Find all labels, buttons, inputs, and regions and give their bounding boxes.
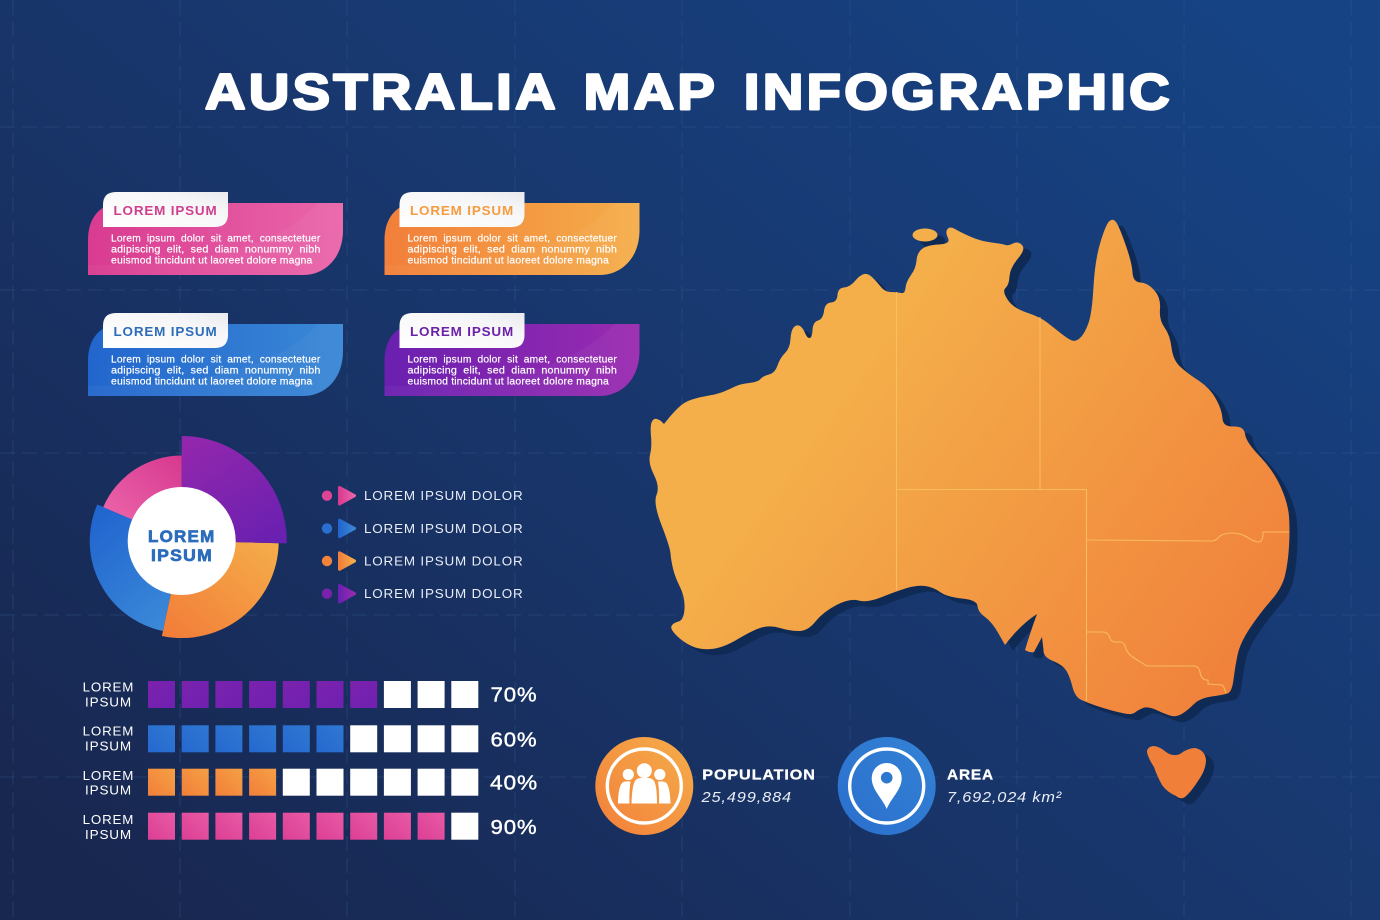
row: 40%: IPSUM xyxy=(85,783,132,798)
card body text: euismod tincidunt ut laoreet dolore magna xyxy=(408,254,609,266)
state borders xyxy=(896,292,1289,701)
row: 70%: LOREM xyxy=(83,679,134,694)
donut label xyxy=(148,528,216,565)
row: 60% xyxy=(83,724,537,753)
row: 60%: IPSUM xyxy=(85,738,132,753)
row: 40% xyxy=(83,768,538,798)
card body text xyxy=(111,232,321,266)
icon: location pin xyxy=(838,737,936,835)
card heading: LOREM IPSUM xyxy=(410,203,514,218)
card body xyxy=(88,324,343,396)
card body text: euismod tincidunt ut laoreet dolore magna xyxy=(408,376,609,388)
donut label: IPSUM xyxy=(151,547,213,565)
card body xyxy=(88,203,343,275)
card tab xyxy=(103,313,228,348)
panel: blue text card xyxy=(88,313,343,396)
card body text: adipiscing elit, sed diam nonummy nibh xyxy=(111,244,320,256)
card body text: Lorem ipsum dolor sit amet, consectetuer xyxy=(408,354,617,366)
segment: purple xyxy=(182,436,287,543)
Melville island xyxy=(912,228,938,242)
card tab xyxy=(103,192,228,227)
Tasmania xyxy=(1147,746,1206,798)
card tab xyxy=(400,313,524,348)
card body text: Lorem ipsum dolor sit amet, consectetuer xyxy=(408,232,617,244)
icon: people xyxy=(595,737,693,835)
card body text xyxy=(408,232,617,266)
segment: blue xyxy=(90,504,172,631)
row: 90% xyxy=(83,812,537,842)
card body text: adipiscing elit, sed diam nonummy nibh xyxy=(408,364,617,376)
card body text: euismod tincidunt ut laoreet dolore magna xyxy=(111,376,312,388)
card body text xyxy=(111,354,321,388)
row: 70%: IPSUM xyxy=(85,694,132,709)
row: 90%: LOREM xyxy=(83,812,134,827)
legend xyxy=(322,488,524,602)
stat: area xyxy=(838,737,1062,835)
row: 40%: 40% xyxy=(490,772,538,794)
card body xyxy=(384,203,640,275)
legend item: blue: LOREM IPSUM DOLOR xyxy=(364,521,524,536)
row: 40%: LOREM xyxy=(83,768,134,783)
title: AUSTRALIA MAP INFOGRAPHIC xyxy=(205,64,1173,120)
row: 60%: 60% xyxy=(490,728,538,752)
population value: 25,499,884 xyxy=(700,789,792,806)
card body xyxy=(384,324,640,396)
row: 70%: 70% xyxy=(490,684,538,706)
donut label: LOREM xyxy=(148,528,215,546)
row: 60%: LOREM xyxy=(83,724,134,739)
mainland xyxy=(650,220,1290,716)
area value: 7,692,024 km² xyxy=(947,789,1062,806)
donut chart xyxy=(90,436,287,638)
card heading: LOREM IPSUM xyxy=(410,324,514,339)
donut centre xyxy=(128,487,236,595)
legend item: pink xyxy=(322,488,524,504)
legend item: blue xyxy=(322,520,524,537)
legend item: purple: LOREM IPSUM DOLOR xyxy=(364,586,524,601)
segment: pink xyxy=(103,456,182,521)
population label: POPULATION xyxy=(702,768,816,784)
card heading: LOREM IPSUM xyxy=(114,203,218,218)
legend item: orange xyxy=(322,553,524,569)
legend item: orange: LOREM IPSUM DOLOR xyxy=(364,554,524,568)
card body text: Lorem ipsum dolor sit amet, consectetuer xyxy=(111,354,321,366)
row: 70% xyxy=(83,679,537,709)
bar chart: progress squares xyxy=(83,679,538,842)
card body text: Lorem ipsum dolor sit amet, consectetuer xyxy=(111,232,321,244)
card tab xyxy=(400,192,524,227)
legend item: purple xyxy=(322,586,524,602)
map: Australia xyxy=(650,220,1298,804)
card body text: adipiscing elit, sed diam nonummy nibh xyxy=(408,244,617,256)
card heading: LOREM IPSUM xyxy=(114,324,218,339)
map shadow xyxy=(658,226,1298,804)
area label: AREA xyxy=(947,768,994,784)
legend item: pink: LOREM IPSUM DOLOR xyxy=(364,488,524,503)
panel: orange text card xyxy=(384,192,640,275)
card body text xyxy=(408,354,617,388)
card body text: adipiscing elit, sed diam nonummy nibh xyxy=(111,364,320,376)
segment: orange xyxy=(162,542,279,638)
row: 90%: IPSUM xyxy=(85,827,132,842)
panel: purple text card xyxy=(384,313,640,396)
card body text: euismod tincidunt ut laoreet dolore magna xyxy=(111,254,312,266)
panel: pink text card xyxy=(88,192,343,275)
stat: population xyxy=(595,737,816,835)
row: 90%: 90% xyxy=(490,816,538,839)
